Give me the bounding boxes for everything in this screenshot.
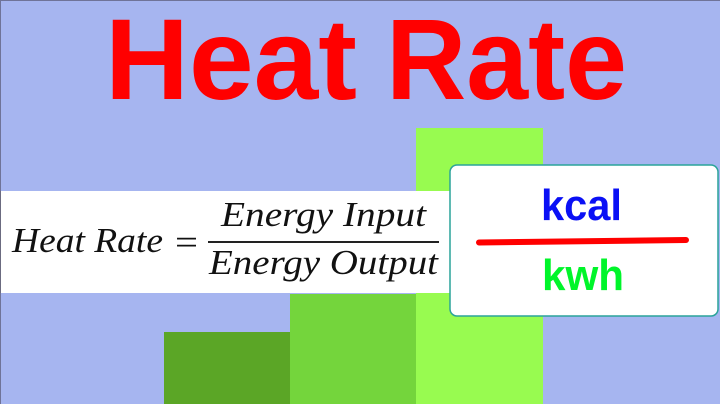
- unit card: [450, 165, 718, 316]
- formula band: [0, 191, 450, 293]
- bar chart: [164, 128, 543, 404]
- title: [105, 0, 627, 124]
- formula left side: Heat Rate: [11, 221, 163, 260]
- fraction bar: [208, 241, 439, 243]
- numerator: Energy Input: [220, 195, 427, 234]
- unit denominator: kwh: kwh: [542, 251, 624, 300]
- unit divider: [479, 240, 686, 242]
- equals sign: =: [175, 223, 198, 262]
- denominator: Energy Output: [208, 243, 439, 282]
- unit numerator: kcal: kcal: [541, 181, 622, 230]
